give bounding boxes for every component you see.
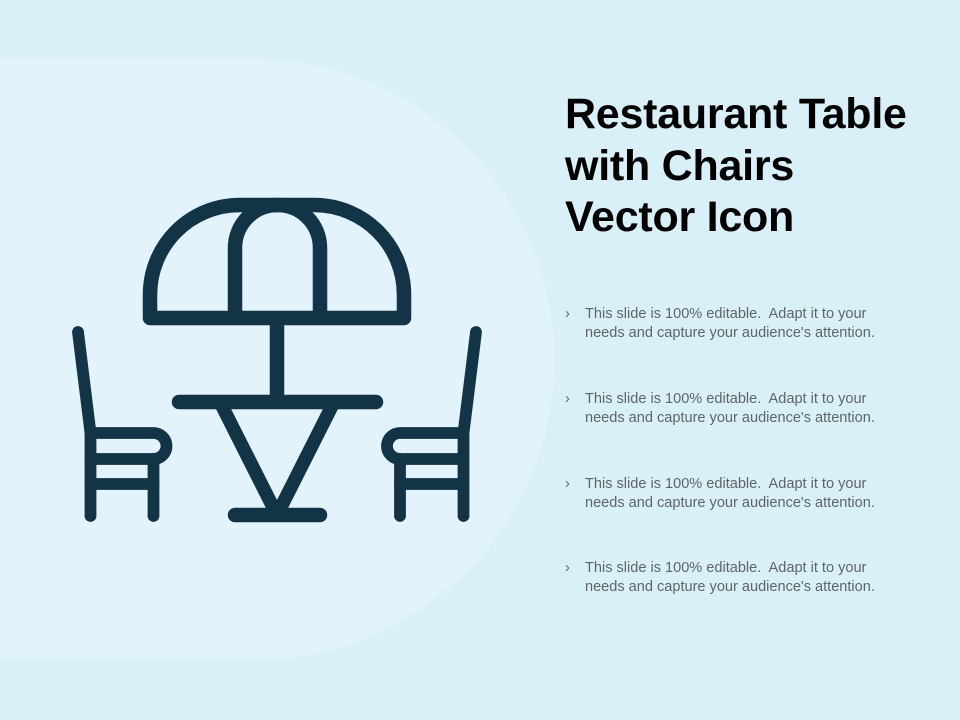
text block 4 bbox=[565, 560, 875, 594]
title: Vector Icon bbox=[565, 193, 794, 241]
text block 3: › bbox=[565, 476, 570, 492]
text block 1: › bbox=[565, 306, 570, 322]
text block 1: needs and capture your audience's attention. bbox=[585, 324, 875, 340]
text block 4: This slide is 100% editable. Adapt it to your bbox=[585, 560, 866, 576]
text block 2: › bbox=[565, 391, 570, 407]
text block 4: › bbox=[565, 560, 570, 576]
left chair bbox=[78, 332, 166, 516]
text block 3: needs and capture your audience's attention. bbox=[585, 494, 875, 510]
umbrella bbox=[150, 205, 404, 318]
text block 2 bbox=[565, 391, 875, 426]
text block 1 bbox=[565, 306, 875, 340]
text block 1: This slide is 100% editable. Adapt it to your bbox=[585, 306, 866, 322]
text block 2: This slide is 100% editable. Adapt it to your bbox=[585, 391, 866, 407]
table base bbox=[220, 402, 334, 515]
right chair bbox=[387, 332, 476, 516]
title bbox=[564, 90, 907, 241]
text block 3 bbox=[565, 476, 875, 510]
text block 4: needs and capture your audience's attention. bbox=[585, 578, 875, 594]
title: Restaurant Table bbox=[565, 90, 907, 138]
text block 2: needs and capture your audience's attention. bbox=[585, 410, 875, 426]
text block 3: This slide is 100% editable. Adapt it to your bbox=[585, 476, 866, 492]
background panel: rounded light shape bbox=[0, 59, 554, 660]
title: with Chairs bbox=[565, 142, 794, 190]
table pole and top bbox=[179, 319, 376, 402]
